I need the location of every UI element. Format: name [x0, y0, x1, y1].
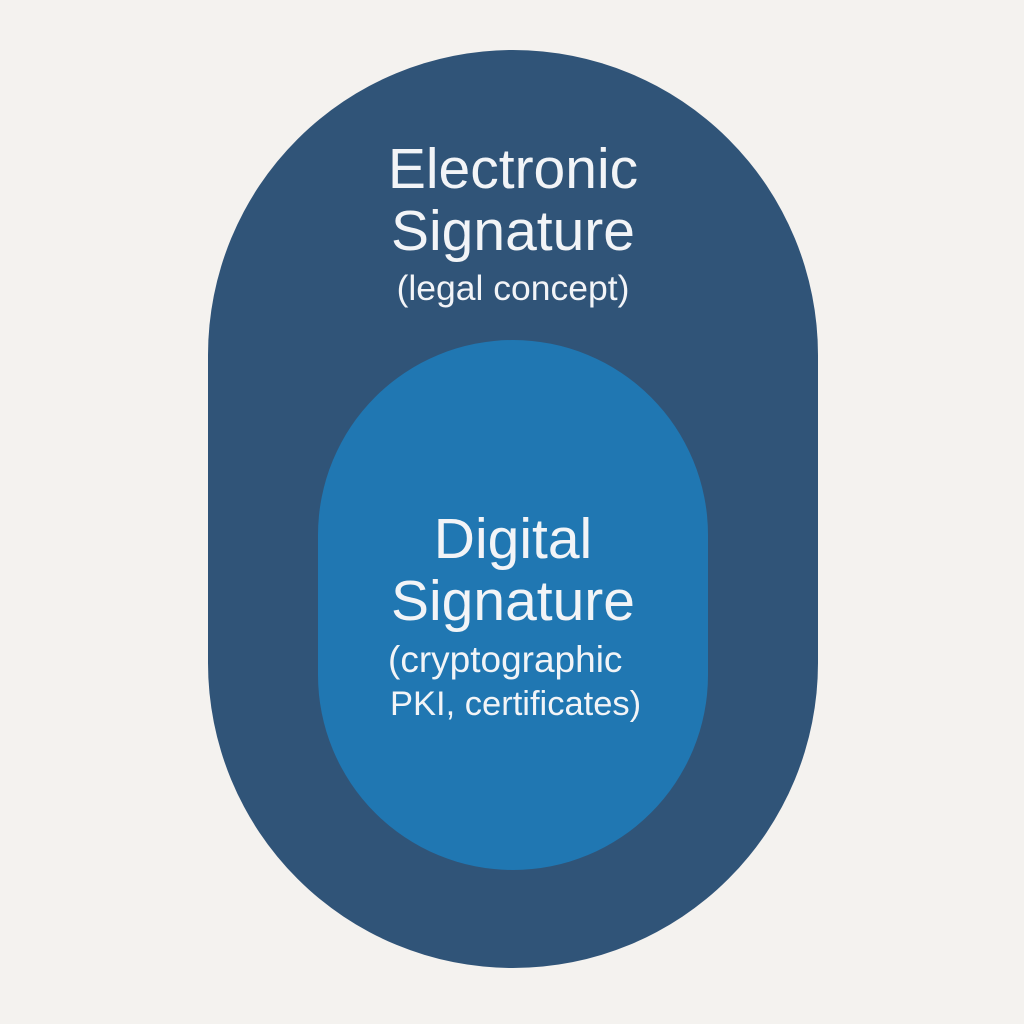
- heading: electronic signature: Electronic: [388, 137, 638, 201]
- heading: digital signature: Digital: [434, 507, 592, 571]
- heading: electronic signature: [388, 137, 638, 263]
- heading: electronic signature: Signature: [391, 199, 635, 263]
- panel: electronic signature outer shape: [208, 50, 818, 968]
- subtitle: cryptographic PKI certificates: PKI, certificates): [390, 685, 641, 723]
- subtitle: cryptographic PKI certificates: [388, 639, 641, 723]
- heading: digital signature: Signature: [391, 569, 635, 633]
- heading: digital signature: [391, 507, 635, 633]
- subtitle: cryptographic PKI certificates: (cryptographic: [388, 639, 622, 680]
- subtitle: legal concept: (legal concept): [397, 268, 629, 308]
- panel: digital signature inner shape: [318, 340, 708, 870]
